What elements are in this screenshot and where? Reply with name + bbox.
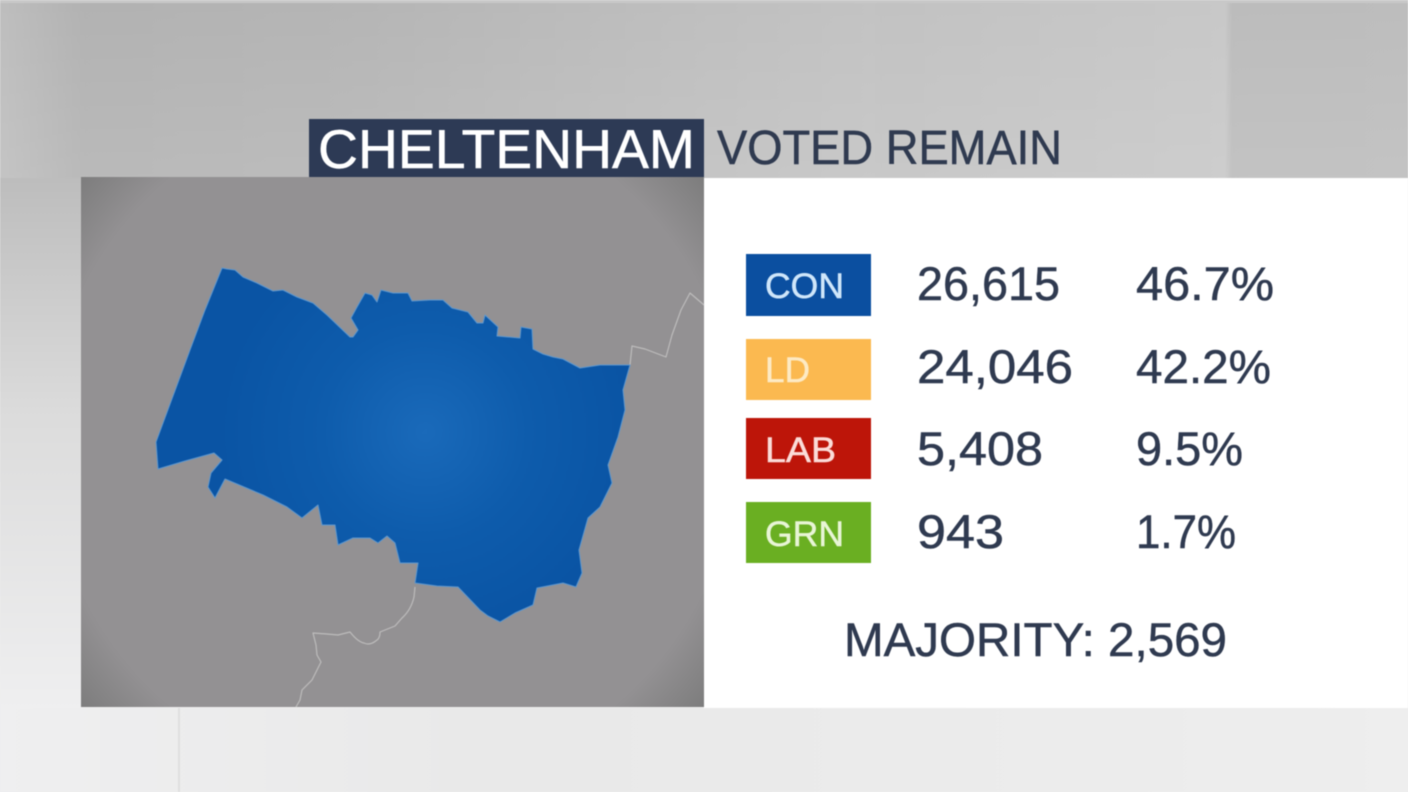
row: Liberal Democrat [746,339,1271,400]
row: Conservative: CON [765,267,844,306]
row: Conservative: 46.7% [1136,257,1274,310]
row: Green: 943 [917,505,1004,558]
row: Labour: LAB [765,431,836,470]
title: constituency name: CHELTENHAM [318,118,695,180]
row: Conservative: 26,615 [917,257,1060,310]
row: Green: GRN [765,515,844,554]
row: Green [746,502,1236,563]
map: Cheltenham constituency shape [156,268,630,622]
row: Labour: 5,408 [917,422,1043,475]
row: Green: 1.7% [1136,505,1236,558]
row: Labour: 9.5% [1136,422,1243,475]
row: Liberal Democrat: 42.2% [1136,340,1271,393]
row: Liberal Democrat: LD [765,351,810,390]
row: Labour [746,418,1243,479]
panel: results background [704,178,1408,708]
panel: constituency map [81,177,704,707]
subtitle: voted remain: VOTED REMAIN [717,122,1062,175]
row: Conservative [746,254,1274,316]
neighbouring boundary lines [296,293,704,707]
majority figure: MAJORITY: 2,569 [844,613,1227,666]
row: Liberal Democrat: 24,046 [917,340,1073,393]
